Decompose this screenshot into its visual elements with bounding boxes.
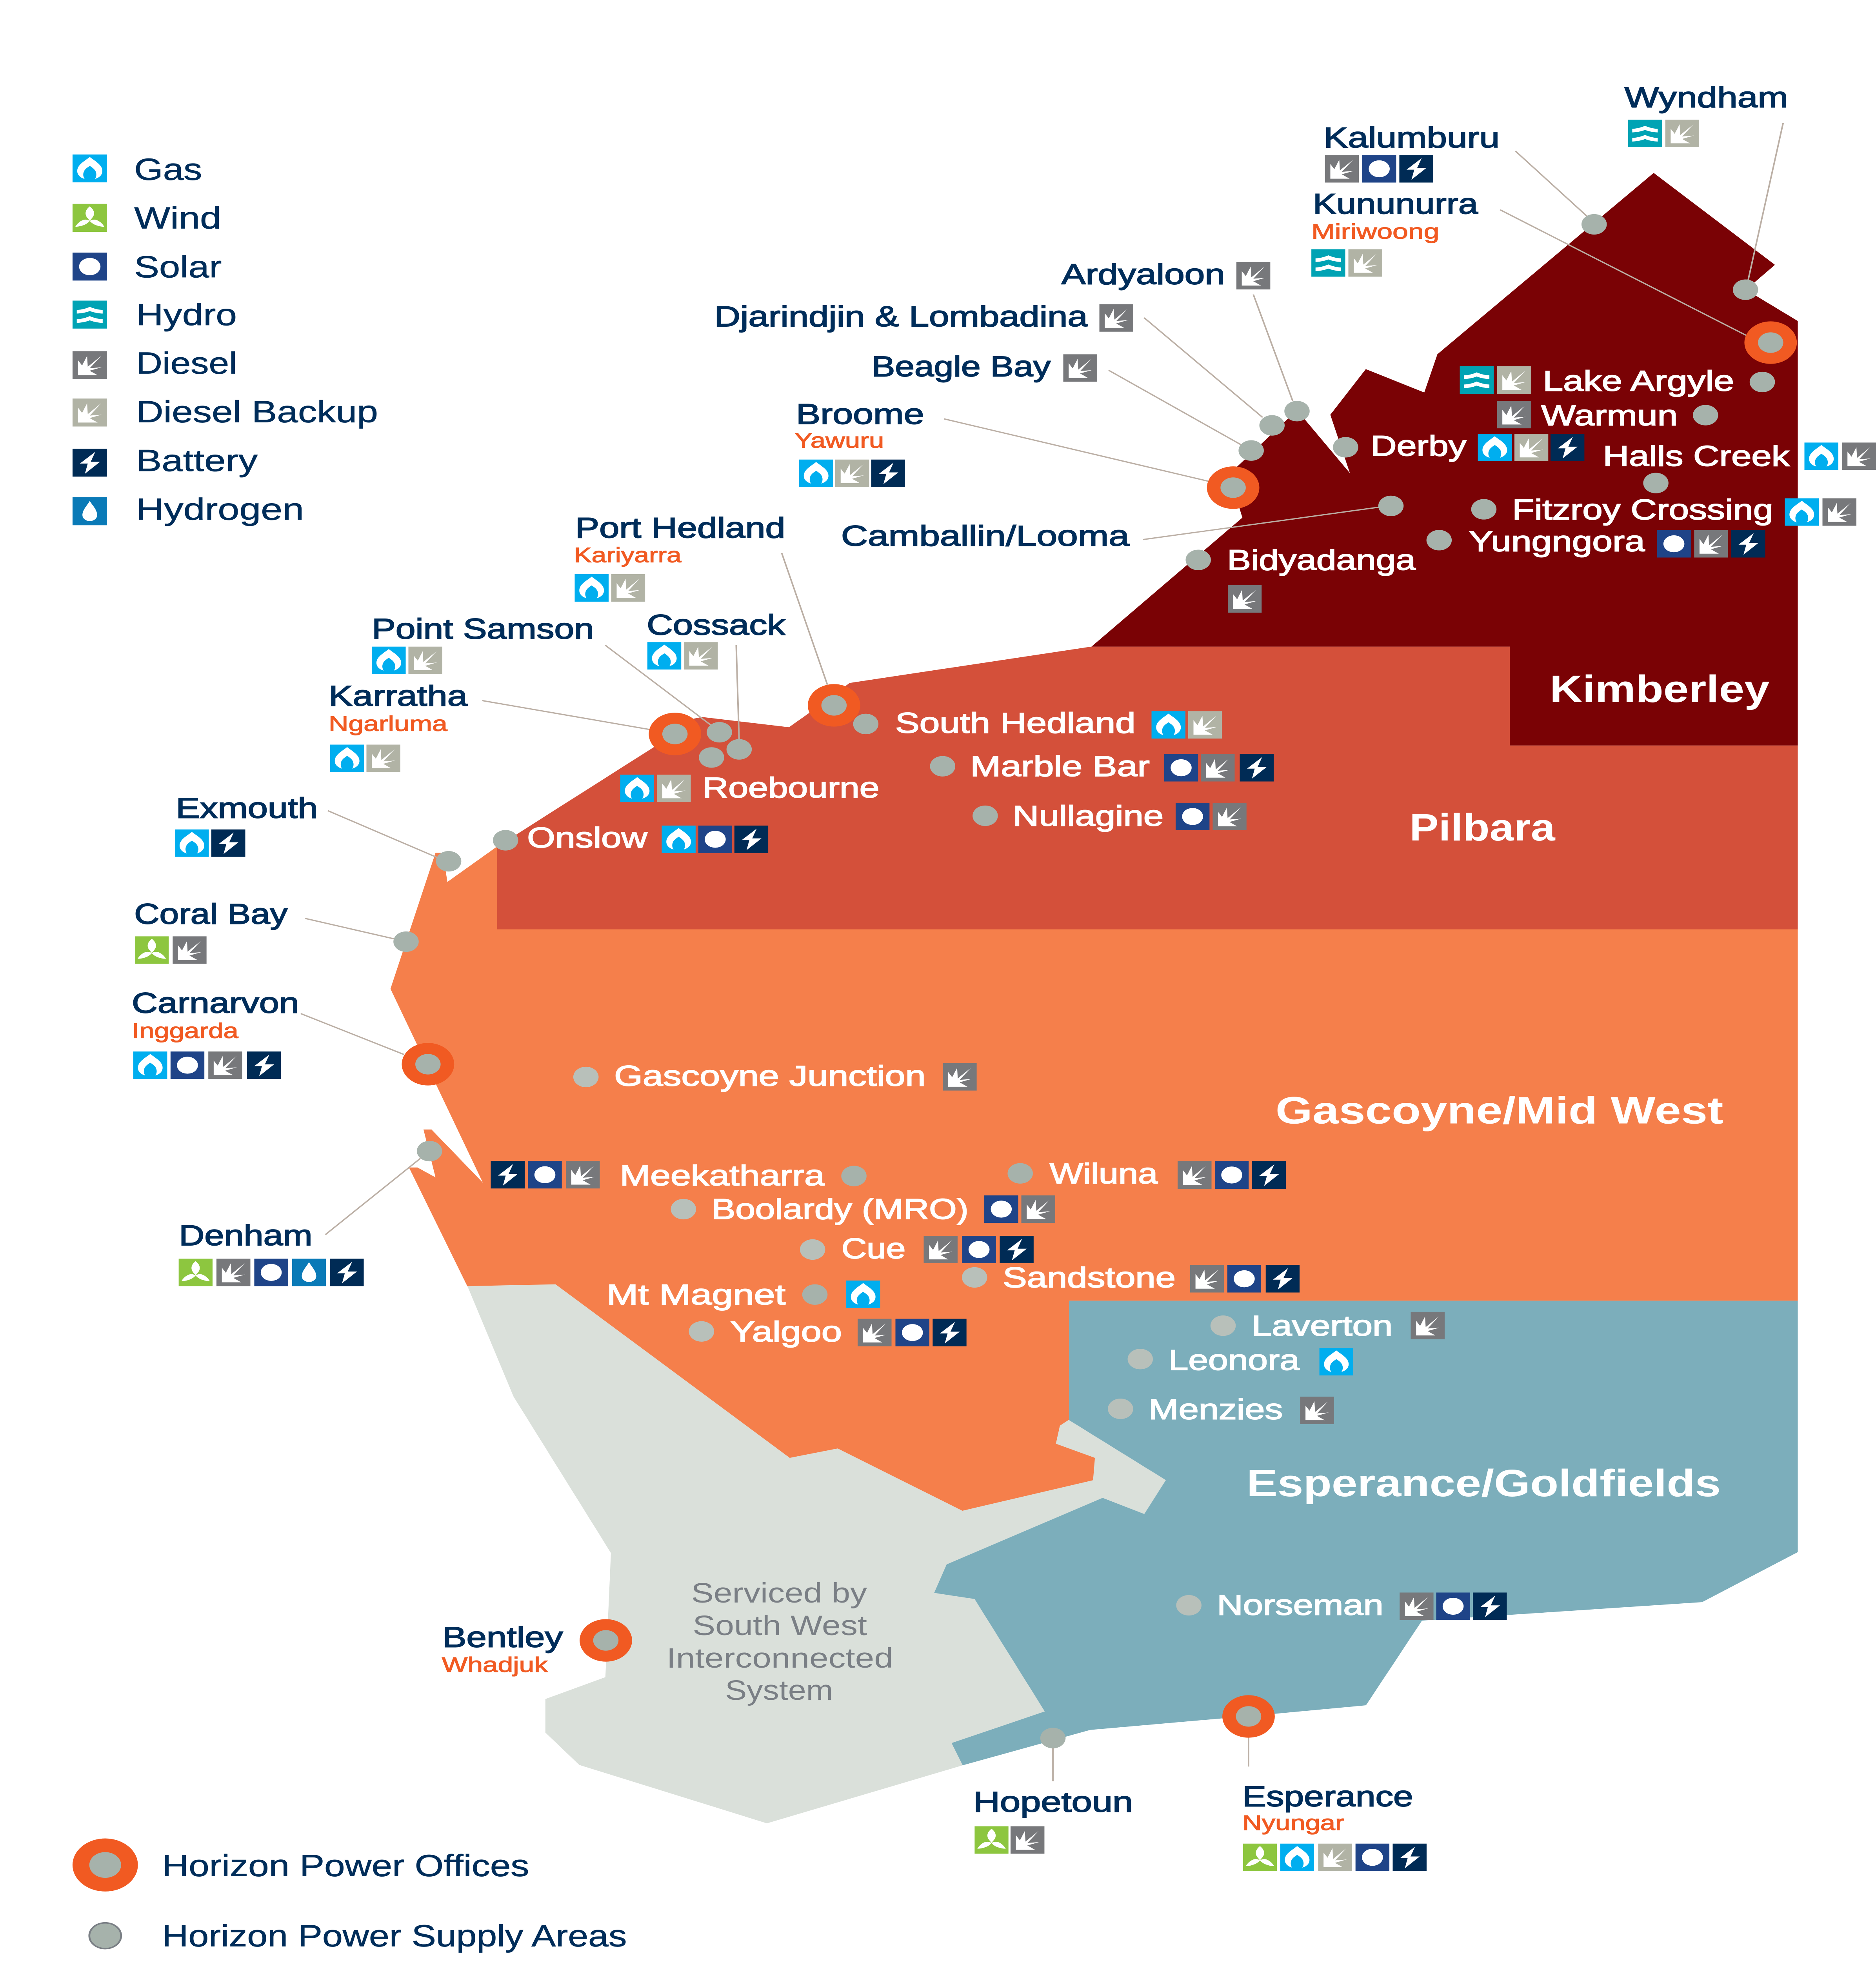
icon: battery [933, 1319, 967, 1346]
town: Cossack [647, 609, 785, 669]
legend item: solar: Solar [134, 250, 222, 284]
town: Karratha: Ngarluma [329, 712, 447, 735]
town: Wyndham [1625, 82, 1788, 147]
icon: solar [1356, 1844, 1389, 1871]
town: Djarindjin & Lombadina: Djarindjin & Lombadina [714, 300, 1088, 333]
icon: diesel [1842, 442, 1876, 470]
town: Kununurra: Kununurra [1313, 188, 1478, 220]
town: Gascoyne Junction: Gascoyne Junction [614, 1060, 926, 1092]
icon: solar [254, 1259, 288, 1286]
icon: wind [974, 1826, 1009, 1854]
town: Carnarvon: Inggarda [132, 1019, 238, 1042]
icon: battery [247, 1051, 281, 1079]
leader lines [301, 123, 1783, 1781]
town: Yungngora [1469, 525, 1765, 558]
icon: diesel [1694, 530, 1728, 558]
icon: battery [491, 1161, 525, 1188]
icon: solar [1436, 1592, 1470, 1620]
town: Karratha: Karratha [329, 680, 467, 712]
icon: solar [895, 1319, 929, 1346]
icon: diesel [1228, 585, 1262, 613]
icon: battery [1551, 434, 1584, 461]
icon: battery [1399, 155, 1433, 182]
town: Mt Magnet [607, 1279, 880, 1311]
icon: gas [1151, 711, 1185, 739]
town: Yalgoo [730, 1315, 967, 1348]
town: Point Samson: Point Samson [372, 613, 594, 645]
legend item: gas [73, 152, 202, 186]
town: Menzies: Menzies [1149, 1393, 1283, 1426]
icon: diesel [173, 936, 207, 964]
town: Cue: Cue [842, 1233, 905, 1265]
icon: diesel backup [835, 460, 869, 487]
icon: battery [871, 460, 905, 487]
town: Kununurra [1311, 188, 1478, 277]
town: Halls Creek: Halls Creek [1603, 440, 1790, 472]
icon: diesel [1100, 304, 1133, 332]
town: Beagle Bay: Beagle Bay [872, 351, 1051, 383]
town: Lake Argyle: Lake Argyle [1543, 365, 1734, 397]
icon: hydro [1311, 249, 1345, 277]
icon: diesel [1325, 155, 1359, 182]
icon: gas [1804, 442, 1838, 470]
icon: diesel backup [684, 642, 718, 669]
town: Wyndham: Wyndham [1625, 82, 1788, 114]
icon: diesel [1190, 1265, 1224, 1293]
icon: battery [330, 1259, 364, 1286]
town: Bidyadanga: Bidyadanga [1227, 544, 1416, 576]
town: Sandstone: Sandstone [1003, 1262, 1176, 1294]
town: Port Hedland: Kariyarra [574, 543, 682, 567]
town: Ardyaloon: Ardyaloon [1062, 258, 1225, 291]
town: Sandstone [1003, 1262, 1300, 1294]
legend item: hydro [73, 298, 237, 332]
town: Broome: Yawuru [794, 428, 884, 452]
icon: battery [1252, 1161, 1286, 1189]
text: Serviced by South West Interconnected System: Serviced by [691, 1577, 867, 1609]
icon: gas [133, 1051, 167, 1079]
icon: diesel [1212, 803, 1247, 830]
town: Roebourne [620, 772, 879, 804]
icon: wind [179, 1259, 213, 1286]
legend item: wind [73, 201, 221, 235]
region name: Kimberley: Kimberley [1550, 668, 1770, 711]
icon: gas [1320, 1348, 1353, 1375]
town: Hopetoun [973, 1786, 1133, 1854]
town: Cossack: Cossack [647, 609, 785, 641]
town: Warmun: Warmun [1541, 400, 1678, 432]
town: Laverton: Laverton [1252, 1310, 1392, 1342]
legend item: battery: Battery [136, 444, 258, 478]
town: Bidyadanga [1227, 544, 1416, 613]
region: Pilbara [497, 647, 1798, 929]
office markers [402, 321, 1797, 1738]
icon: diesel [566, 1161, 600, 1188]
icon: diesel backup [611, 574, 645, 602]
town: Bentley: Whadjuk [442, 1653, 548, 1677]
text: Serviced by South West Interconnected System: South West [693, 1610, 867, 1641]
icon: gas [330, 745, 364, 772]
icon: diesel backup [1188, 711, 1222, 739]
icon: gas [647, 642, 681, 669]
town: Boolardy (MRO): Boolardy (MRO) [712, 1193, 969, 1225]
town: Fitzroy Crossing: Fitzroy Crossing [1512, 493, 1773, 526]
town: Marble Bar [970, 750, 1274, 782]
town: Karratha [329, 680, 467, 772]
town: Exmouth: Exmouth [176, 792, 318, 824]
icon: solar [1362, 155, 1396, 182]
legend item: hydro: Hydro [136, 298, 237, 332]
icon: diesel [1011, 1826, 1044, 1854]
icon: diesel [1822, 498, 1856, 526]
town: Bentley: Bentley [442, 1621, 564, 1653]
region name: Pilbara: Pilbara [1409, 806, 1556, 849]
town: Port Hedland: Port Hedland [575, 512, 785, 544]
icon: battery [1392, 1844, 1427, 1871]
icon: gas [799, 460, 833, 487]
town: Esperance: Esperance [1242, 1780, 1413, 1812]
region name: Gascoyne/Mid West: Gascoyne/Mid West [1276, 1089, 1723, 1132]
icon: hydro [1628, 120, 1662, 147]
town: Wiluna [1050, 1157, 1286, 1190]
icon: diesel [1178, 1161, 1212, 1189]
icon: solar [528, 1161, 562, 1188]
legend item: Horizon Power Offices: Horizon Power Offices [162, 1848, 529, 1883]
town: Nullagine [1013, 800, 1247, 832]
legend item: gas: Gas [134, 152, 202, 186]
legend item: Horizon Power Offices [73, 1839, 529, 1892]
icon: solar [171, 1051, 204, 1079]
legend item: Horizon Power Supply Areas: Horizon Power Supply Areas [162, 1919, 627, 1953]
town: Kalumburu [1324, 122, 1500, 182]
town: Wiluna: Wiluna [1050, 1157, 1158, 1190]
icon: solar [984, 1195, 1018, 1223]
town: Lake Argyle [1460, 365, 1734, 397]
icon: diesel [208, 1051, 242, 1079]
town: Kalumburu: Kalumburu [1324, 122, 1500, 154]
icon: battery [734, 826, 768, 853]
town: Coral Bay: Coral Bay [134, 898, 288, 930]
town: Meekatharra [491, 1159, 825, 1192]
icon: diesel backup [1665, 120, 1699, 147]
town: South Hedland: South Hedland [895, 707, 1136, 739]
text: Serviced by South West Interconnected System: System [725, 1675, 833, 1706]
icon: diesel [923, 1236, 958, 1263]
town: Derby: Derby [1371, 430, 1467, 462]
icon: solar [1657, 530, 1691, 558]
town: Kununurra: Miriwoong [1311, 219, 1440, 243]
icon: diesel [1411, 1312, 1445, 1339]
icon: wind [135, 936, 169, 964]
legend: energy sources [73, 152, 378, 526]
icon: gas [662, 826, 696, 853]
town: Norseman: Norseman [1217, 1589, 1383, 1621]
icon: diesel [943, 1063, 977, 1091]
icon: diesel backup [1514, 434, 1548, 461]
icon: gas [574, 574, 609, 602]
legend item: solar [73, 250, 222, 284]
icon: diesel [1236, 262, 1270, 289]
town: Roebourne: Roebourne [703, 772, 879, 804]
icon: battery [211, 830, 245, 857]
region: Esperance/Goldfields [934, 1301, 1798, 1765]
icon: solar [1176, 803, 1209, 830]
town: Marble Bar: Marble Bar [970, 750, 1150, 782]
town: Bentley [442, 1621, 564, 1677]
icon: battery [1731, 530, 1765, 558]
legend item: diesel backup: Diesel Backup [136, 395, 378, 429]
icon: diesel [1300, 1397, 1334, 1424]
town: Leonora: Leonora [1169, 1344, 1300, 1376]
legend item: diesel [73, 346, 237, 380]
supply area dots [393, 214, 1775, 1748]
icon: solar [698, 826, 732, 853]
legend item: battery [73, 444, 258, 478]
town: Onslow [527, 822, 768, 854]
icon: diesel [1497, 401, 1531, 428]
icon: battery [1266, 1265, 1300, 1293]
region name: Esperance/Goldfields: Esperance/Goldfields [1247, 1462, 1721, 1504]
map of Western Australia regions [391, 173, 1798, 1823]
icon: solar [1227, 1265, 1261, 1293]
region: Gascoyne/Mid West [391, 846, 1798, 1511]
town: Coral Bay [134, 898, 288, 964]
icon: diesel backup [1497, 366, 1531, 394]
town: Nullagine: Nullagine [1013, 800, 1163, 832]
icon: gas [846, 1281, 880, 1308]
icon: diesel backup [366, 745, 400, 772]
town: Yalgoo: Yalgoo [730, 1315, 842, 1348]
icon: diesel [1201, 754, 1235, 782]
legend item: diesel: Diesel [136, 346, 237, 380]
legend item: hydrogen: Hydrogen [136, 492, 304, 526]
icon: battery [1473, 1592, 1507, 1620]
town: Carnarvon: Carnarvon [132, 987, 299, 1019]
icon: gas [1785, 498, 1819, 526]
town: Meekatharra: Meekatharra [620, 1159, 825, 1192]
icon: hydro [1460, 366, 1494, 394]
icon: solar [1215, 1161, 1249, 1189]
icon: solar [1164, 754, 1198, 782]
icon: diesel [216, 1259, 251, 1286]
town: Denham: Denham [179, 1219, 313, 1252]
text: Serviced by South West Interconnected System [667, 1577, 893, 1706]
icon: gas [1280, 1844, 1314, 1871]
icon: wind [1243, 1844, 1277, 1871]
legend item: wind: Wind [134, 201, 221, 235]
town: Yungngora: Yungngora [1469, 525, 1645, 557]
town: Esperance [1242, 1780, 1427, 1871]
icon: battery [1000, 1236, 1034, 1263]
town: Norseman [1217, 1589, 1507, 1621]
icon: gas [175, 830, 209, 857]
town: Carnarvon [132, 987, 299, 1079]
icon: battery [1240, 754, 1274, 782]
town: Esperance: Nyungar [1242, 1811, 1344, 1835]
town: Point Samson [372, 613, 594, 674]
town: Mt Magnet: Mt Magnet [607, 1279, 785, 1311]
town: Denham [179, 1219, 364, 1286]
legend: marker types [73, 1839, 627, 1953]
icon: hydrogen [292, 1259, 326, 1286]
icon: gas [620, 775, 654, 802]
town: Exmouth [175, 792, 318, 857]
icon: solar [962, 1236, 996, 1263]
icon: diesel [1021, 1195, 1055, 1223]
town: Halls Creek [1603, 440, 1876, 472]
town: Derby [1371, 430, 1584, 462]
town: Hopetoun: Hopetoun [973, 1786, 1133, 1818]
icon: diesel [858, 1319, 892, 1346]
town: Port Hedland [574, 512, 785, 602]
region: Kimberley [1091, 173, 1798, 746]
town: Cue [842, 1233, 1034, 1265]
icon: diesel [1400, 1592, 1434, 1620]
text: Serviced by South West Interconnected System: Interconnected [667, 1643, 893, 1674]
icon: diesel backup [1318, 1844, 1352, 1871]
icon: diesel [1063, 354, 1097, 382]
region: South West Interconnected System [467, 1284, 1166, 1823]
icon: diesel backup [657, 775, 691, 802]
town: Camballin/Looma: Camballin/Looma [841, 520, 1129, 552]
town: Broome [794, 398, 924, 487]
town: Onslow: Onslow [527, 822, 647, 854]
icon: diesel backup [408, 647, 442, 674]
icon: gas [372, 647, 406, 674]
town: Broome: Broome [796, 398, 924, 430]
icon: diesel backup [1348, 249, 1382, 277]
icon: gas [1478, 434, 1512, 461]
